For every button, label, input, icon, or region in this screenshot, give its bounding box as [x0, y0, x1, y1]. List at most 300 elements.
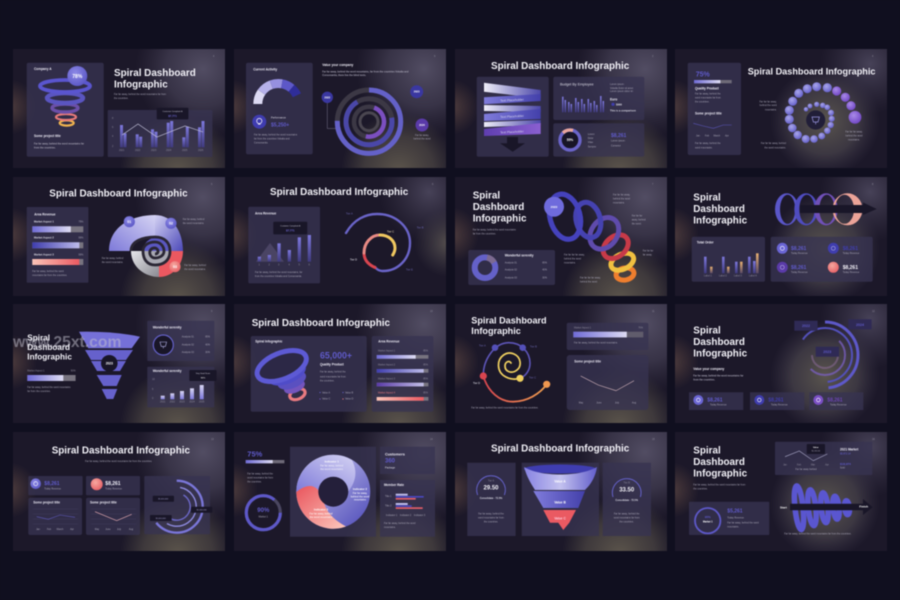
card: serenity ring: Analysis 01	[182, 336, 195, 339]
card: donut 55 percent: 55%	[567, 138, 573, 142]
text: label 01: the word mountains.	[102, 261, 124, 264]
card: area revenue chart: 4	[288, 264, 290, 267]
card: customers	[380, 447, 435, 474]
card: swirl donut: Far far away,	[353, 492, 368, 495]
card: member rate: Indicator 1	[386, 514, 398, 517]
text: project title: Some project title	[34, 134, 61, 138]
card: quality product: word mountains.	[695, 146, 713, 149]
panel: slide 7 ring chain: 7	[652, 183, 654, 186]
card: donut 55 percent: Vitae	[588, 141, 594, 144]
card: quality product: word mountains far from	[695, 96, 721, 99]
callout: tooltip: Very Good Score	[196, 372, 210, 375]
card: company A spiral	[27, 63, 104, 157]
badge: 2023: 2023	[106, 362, 113, 366]
panel: slide 9 funnel 2023: 9	[211, 310, 213, 313]
card: stacked funnel	[477, 77, 549, 157]
panel: slide 4 bead spiral: 4	[872, 55, 874, 58]
card: market 1: mountains.	[727, 526, 739, 529]
text: value your company: Far far away, behind the word mountains far	[693, 375, 743, 378]
card: revenue stats	[771, 237, 873, 282]
card: concentric arcs	[144, 476, 210, 534]
badge: 01	[124, 216, 135, 227]
badge: 03	[169, 261, 181, 272]
title: Spiral Dashboard	[114, 68, 196, 79]
diagram: funnel stack	[79, 332, 140, 399]
panel: slide 12 arcs and stats	[675, 304, 887, 423]
panel: slide 1 company A	[13, 49, 225, 168]
card: area revenue bars: 85%	[423, 391, 429, 394]
card: customers: 360	[385, 458, 396, 464]
text: ring label 2: Far far far	[632, 215, 642, 218]
stat card: revenue blue: $8,261	[44, 481, 60, 487]
progress bar: market aspect	[27, 370, 76, 381]
card: area revenue: Market Aspect 1	[34, 220, 54, 224]
card: area revenue chart: 5	[298, 264, 300, 267]
panel: slide 1 company A: 4	[213, 55, 215, 58]
bar chart: yearly values: 2023	[151, 149, 157, 152]
card: area revenue chart	[248, 207, 320, 283]
line chart: jan to apr: Apr	[70, 528, 74, 531]
card: area revenue: Market Aspect 2	[34, 236, 54, 240]
card: area revenue	[27, 207, 88, 283]
card: member rate	[380, 480, 435, 537]
card: donut 55 percent: Lorem ipsum	[611, 140, 625, 143]
diagram: twisted spiral on arrow	[790, 485, 873, 530]
title: Infographic	[693, 469, 748, 480]
card: wonderful serenity: 30%	[542, 276, 548, 279]
bar chart: yearly values: 8	[112, 117, 114, 120]
panel: slide 5 nautilus spiral	[13, 177, 225, 296]
card: area revenue: Far far away, behind the word	[32, 270, 64, 273]
donut: 90 percent: 90%	[257, 508, 270, 514]
card: market aspect: 76%	[638, 326, 644, 329]
card: spiral infographic: Spiral Infographic	[255, 340, 283, 344]
badge: 78 percent: 78%	[72, 74, 83, 80]
card: value funnel: Value B	[554, 500, 566, 504]
card: serenity bars	[147, 367, 214, 407]
card: gauge 33.50: the countries.	[620, 521, 634, 524]
text: description: Far far away, behind the word mountains	[27, 386, 70, 389]
card: revenue stats: Today Revenue	[791, 252, 808, 255]
diagram: nautilus spiral	[109, 215, 183, 277]
text: description: the countries.	[693, 488, 708, 491]
bar chart: yearly values: 2025	[182, 149, 188, 152]
panel: slide 2 value your company	[234, 49, 446, 168]
card: budget by employee: Vokalia Dolor sit amet	[610, 87, 633, 90]
card: quality product: Some project title	[695, 112, 722, 116]
stat card: revenue 2: $8,261	[768, 398, 784, 404]
text: ring label 1: mountains.	[613, 202, 625, 205]
card: revenue stats: Today Revenue	[791, 271, 808, 274]
text: tier labels: Tier A	[479, 344, 486, 348]
bar chart: yearly values: 2026	[198, 149, 204, 152]
panel: slide 16 spiral arrow	[675, 432, 887, 551]
chart: concentric arcs	[787, 317, 863, 393]
badge: 2023	[101, 355, 118, 372]
card: donut 55 percent: Dolor	[588, 137, 594, 140]
card: gauge 33.50: word mountains far from	[614, 516, 640, 519]
text: value your company: Value your company	[693, 367, 724, 371]
card: total order chart: Label 2	[719, 274, 728, 277]
card: total order chart: Total Order	[697, 240, 714, 244]
callout: tooltip	[273, 222, 307, 234]
card: swirl donut: Indicator 2	[353, 487, 367, 491]
card: budget by employee: Euro	[610, 98, 617, 102]
card: serenity bars: 10	[152, 378, 155, 381]
card: wonderful serenity: Analysis 02	[505, 269, 518, 272]
panel: slide 13 line charts	[13, 432, 225, 551]
text: tier labels: Tier B	[417, 225, 424, 229]
text: ring label 5: Far far far far away,	[580, 276, 601, 279]
panel: slide 3 funnel and budget	[455, 49, 667, 168]
card: market line chart: 2021 Market	[840, 448, 859, 452]
marker: 2023	[410, 85, 423, 98]
text: description: Far far away, behind the word mountains far from	[693, 483, 745, 486]
heading: value your company: Far far away, behind the word mountains, far from the countries Vokalia and	[322, 70, 409, 73]
panel: slide 6 area revenue spiral: 6	[432, 183, 434, 186]
progress bar: market aspect: 90%	[71, 370, 76, 373]
title: Dashboard	[27, 343, 70, 352]
card: swirl donut: Far far away, behind	[320, 464, 344, 468]
text: ring label 5: behind the word.	[580, 280, 598, 283]
card: donut 55 percent: Sempre	[588, 145, 597, 148]
card: serenity bars: 2025	[199, 401, 205, 404]
card: spiral infographic: word mountains far from	[320, 375, 346, 378]
bar chart: yearly values	[108, 110, 212, 157]
heading: value your company: Consonantia, there live the blind texts.	[322, 74, 366, 77]
card: swirl donut	[290, 447, 376, 537]
badge: 2023	[544, 197, 564, 217]
stat card: revenue 2	[750, 392, 804, 410]
card: serenity ring: Analysis 03	[182, 351, 195, 354]
text: tier labels: Tier E	[406, 267, 413, 271]
text: caption: Far far away, behind the word mountains far from the countries.	[471, 406, 539, 409]
text: bead label left: behind the word	[760, 104, 777, 107]
card: area revenue chart: 6	[308, 264, 310, 267]
card: gauge 29.50: Consolidate - 72.5%	[480, 497, 503, 500]
card: stacked funnel: Text Placeholder	[500, 129, 525, 135]
card: serenity bars: 5	[152, 388, 154, 391]
card: total order chart: Label 1	[704, 274, 713, 277]
card: quality product: Feb	[705, 135, 710, 138]
card: market line chart: Apr	[825, 464, 829, 467]
callout: tooltip: $1,200.00	[812, 450, 820, 452]
card: quality product: Jan	[696, 135, 701, 138]
panel: slide 4 bead spiral	[675, 49, 887, 168]
text: ring label 2: the word.	[632, 223, 642, 226]
text: description: the countries.	[247, 481, 262, 484]
stat card: revenue 1: Today Revenue	[710, 404, 727, 407]
panel: slide 2 value your company: 9	[434, 55, 436, 58]
panel: slide 16 spiral arrow: 16	[872, 438, 875, 441]
panel: slide 14 swirl donut: 14	[430, 438, 433, 441]
card: budget by employee: Budget By Employee	[560, 83, 594, 87]
label: 2022: 2022	[802, 324, 810, 328]
card: line chart: June	[596, 401, 602, 404]
panel: slide 12 arcs and stats: 12	[872, 310, 875, 313]
card: gauge 29.50: the countries.	[484, 521, 499, 524]
card: area revenue bars: Market Aspect 2	[378, 364, 396, 367]
donut: 90 percent: Market 1	[259, 515, 269, 518]
line chart: may to aug	[86, 498, 140, 535]
card: spiral infographic: Value C	[322, 398, 331, 401]
card: serenity ring: 40%	[205, 343, 211, 346]
card: member rate: Far far away, behind the word	[384, 522, 415, 525]
panel: slide 5 nautilus spiral: 5	[211, 183, 213, 186]
card: stacked funnel: Text Placeholder	[500, 98, 525, 103]
marker: 2024	[413, 118, 431, 141]
line chart: may to aug: Some project title	[90, 500, 117, 504]
card: market line chart: Sold	[840, 466, 845, 469]
card: gauge 29.50: word mountains far from	[478, 516, 504, 519]
card: revenue stats: $8,261	[791, 246, 807, 252]
card: serenity bars: 2021	[160, 401, 166, 404]
card: area revenue bars: 85%	[423, 364, 429, 367]
stat card: revenue 3: Today Revenue	[830, 404, 847, 407]
card: serenity bars: Wonderful serenity	[153, 369, 182, 373]
card: spiral infographic: 65,000+	[320, 350, 352, 360]
card: gauge 29.50: 29.50	[483, 486, 499, 492]
text: bead label left: mountains.	[765, 109, 777, 112]
title: Spiral Dashboard Infographic	[748, 66, 875, 76]
card: serenity ring	[147, 321, 214, 361]
callout: tooltip	[189, 370, 217, 381]
title: Dashboard	[473, 202, 524, 213]
title: Spiral	[693, 325, 721, 336]
card: gauge 33.50: 33.50	[619, 488, 635, 494]
text: ring label 3: far away.	[643, 254, 653, 257]
diagram: 3D cone spiral	[253, 344, 320, 410]
card: serenity bars: 2024	[189, 401, 195, 404]
card: total order chart: Label 3	[734, 274, 743, 277]
callout: tooltip	[157, 108, 188, 119]
panel: slide 7 ring chain	[455, 177, 667, 296]
text: description: word mountains far from	[247, 477, 273, 480]
card: wonderful serenity: Analysis 01	[505, 261, 518, 264]
badge: 01: 01	[127, 220, 131, 224]
card: spiral infographic: Quality Product	[320, 362, 345, 366]
label: finish: Finish	[859, 505, 868, 509]
title: Spiral	[27, 334, 50, 343]
card: area revenue chart: Far far away, behind the word mountains, far	[255, 271, 302, 274]
card: line chart: May	[579, 401, 584, 404]
card: member rate: Title 1	[385, 495, 392, 498]
card: quality product: the countries.	[695, 100, 710, 103]
text: intro: Far far away, behind the word mountains far from	[114, 93, 166, 96]
card: donut 55 percent: $8,261	[611, 133, 627, 139]
title: Infographic	[693, 349, 748, 360]
card: gauge 33.50	[603, 463, 651, 536]
text: ring label 2: away, behind	[632, 219, 646, 222]
progress bar: 75 percent	[246, 460, 284, 463]
card: spiral infographic: Value A	[322, 391, 330, 394]
card: area revenue: mountains far from the countries.	[32, 274, 68, 277]
card: budget by employee: $999	[616, 102, 622, 106]
title: Spiral	[693, 445, 721, 456]
progress bar: market aspect: Market Aspect 1	[27, 370, 45, 373]
card: wonderful serenity: 40%	[542, 269, 548, 272]
card: total order chart	[692, 237, 765, 282]
card: area revenue bars: Market Aspect 3	[378, 377, 396, 380]
bar chart: yearly values: 4	[112, 135, 114, 138]
line chart: may to aug: June	[105, 528, 111, 531]
title: Spiral Dashboard Infographic	[252, 318, 390, 329]
card: quality product: Apr	[725, 135, 729, 138]
card: swirl donut: Indicator 3	[314, 508, 328, 512]
card: area revenue chart: 3	[278, 264, 280, 267]
marker: 2024: Far far away,	[415, 134, 429, 137]
card: swirl donut: Indicator 1	[325, 460, 339, 464]
card: line chart: July	[615, 401, 620, 404]
card: swirl donut: the word mountains	[310, 516, 333, 519]
card: line chart	[567, 355, 648, 410]
marker: 2023: 2023	[414, 90, 420, 94]
label: start: Start	[780, 506, 787, 510]
title: Spiral Dashboard Infographic	[49, 189, 188, 200]
card: wonderful serenity: Analysis 03	[505, 276, 518, 279]
title: Spiral Dashboard	[471, 315, 547, 325]
card: serenity ring: 65%	[205, 336, 211, 339]
line chart: jan to apr: Some project title	[33, 500, 60, 504]
diagram: rings on arrow	[775, 193, 862, 225]
card: area revenue bars: Market Aspect 1	[378, 350, 396, 353]
callout: tooltip: Customer Complaint A	[280, 224, 301, 228]
card: company A spiral: Company A	[34, 67, 52, 71]
card: member rate: mountains.	[384, 526, 396, 529]
text: activity description: Far far away, behind the word mountains	[254, 134, 297, 137]
label: 2024: 2024	[856, 323, 864, 327]
label: value two	[191, 507, 212, 513]
stat card: revenue 3	[809, 392, 863, 410]
label: value three: $1,000,000	[156, 518, 167, 520]
label: 2024	[848, 319, 872, 329]
diagram: ring chain	[545, 191, 636, 281]
card: serenity ring: 30%	[205, 351, 211, 354]
panel: slide 10 spiral infographic: 10	[430, 310, 433, 313]
card: value funnel: Value A	[554, 479, 566, 483]
panel: slide 15 value funnel: 15	[652, 438, 655, 441]
card: market 1: Today Revenue	[727, 516, 745, 519]
label: 2022	[794, 321, 818, 331]
text: ring label 1: Far far far away,	[613, 194, 630, 197]
title: Spiral	[473, 191, 500, 202]
card: market 1: Far far away, behind the word	[727, 521, 759, 524]
stat card: revenue red	[86, 476, 140, 495]
text: bead label bottom: the word mountains.	[764, 146, 786, 149]
panel: slide 9 funnel 2023	[12, 304, 225, 423]
text: ring label 4: Far far far far away,	[564, 254, 585, 257]
text: project title: Far far away, behind the word mountains far	[34, 143, 84, 146]
bar chart: yearly values: 6	[112, 126, 114, 129]
arrow: start to finish	[790, 499, 873, 515]
text: intro: far from the countries.	[473, 232, 496, 235]
card: serenity ring: Analysis 02	[182, 343, 195, 346]
card: current activity	[246, 63, 313, 154]
title: Infographic	[27, 352, 72, 361]
card: current activity: Current Activity	[253, 68, 277, 72]
card: value funnel	[522, 463, 599, 536]
text: tier labels: Tier C	[529, 375, 536, 379]
card: spiral infographic: Far far away, behind the	[320, 371, 346, 374]
card: budget by employee: This is a comparison	[610, 108, 636, 112]
chart: concentric rings	[337, 90, 401, 153]
marker: 2024: 2024	[419, 123, 425, 127]
card: customers: Customers	[385, 452, 405, 456]
card: budget by employee	[553, 77, 644, 120]
text: caption: Far far away, behind the word mountains far from the countries.	[784, 533, 852, 536]
panel: slide 10 spiral infographic	[234, 304, 446, 423]
panel: slide 11 tier spiral: 11	[652, 310, 655, 313]
text: ring label 3: Far far far	[643, 250, 653, 253]
card: area revenue chart: 2	[268, 264, 270, 267]
marker: 2022: 2022	[324, 95, 331, 99]
panel: slide 3 funnel and budget: 3	[652, 55, 654, 58]
title: Dashboard	[693, 204, 745, 215]
label: value three	[150, 515, 172, 521]
card: total order chart: Label 4	[749, 274, 758, 277]
card: spiral infographic	[251, 336, 367, 412]
card: gauge 29.50	[467, 463, 516, 536]
card: area revenue bars: 85%	[423, 377, 429, 380]
text: bead label left: Far far far away,	[759, 100, 777, 103]
card: gauge 33.50: Consolidate - 72.5%	[615, 499, 639, 502]
stat card: revenue 1	[689, 392, 743, 410]
card: member rate: Member Rate	[384, 483, 404, 487]
text: ring label 1: behind the word	[613, 197, 631, 200]
card: value funnel: Value C	[554, 517, 566, 521]
title: Spiral Dashboard Infographic	[491, 61, 630, 72]
card: customers: Package	[385, 465, 396, 469]
callout: tooltip: 90%	[201, 378, 205, 380]
line chart: may to aug: July	[117, 528, 122, 531]
text: tier labels: Tier A	[346, 211, 353, 215]
line chart: jan to apr: March	[57, 528, 64, 531]
text: bead label right: Far far far away,	[845, 131, 863, 134]
card: market 1: 90%	[705, 515, 711, 519]
card: market 1: Market 1	[703, 520, 713, 524]
icon: trophy center	[806, 110, 825, 130]
badge: 2023: 2023	[551, 205, 558, 209]
callout: tooltip: Value	[813, 447, 819, 449]
card: revenue stats: $8,261	[843, 246, 858, 252]
bar chart: yearly values: 2022	[135, 149, 141, 152]
card: swirl donut: behind the word	[351, 495, 370, 498]
panel: slide 6 area revenue spiral	[234, 177, 446, 296]
card: market line chart: $5,872.14	[840, 452, 851, 455]
callout: tooltip	[807, 444, 825, 454]
text: project title: from the countries.	[34, 146, 56, 149]
card: line chart: Aug	[632, 401, 637, 404]
text: 75 percent: 75%	[247, 450, 263, 459]
panel: slide 8 ring arrow: 8	[872, 183, 874, 186]
card: member rate: Indicator 3	[414, 514, 426, 517]
line chart: may to aug: May	[95, 528, 100, 531]
card: budget by employee: Lorem ipsum	[610, 83, 624, 86]
card: gauge 33.50: Tier B	[624, 482, 630, 485]
label: 2023	[816, 347, 839, 357]
line chart: jan to apr	[28, 498, 82, 535]
card: quality product	[688, 63, 741, 155]
text: tier labels	[346, 211, 424, 271]
title: Spiral Dashboard Infographic	[52, 446, 190, 457]
card: spiral infographic: Value D	[345, 398, 354, 401]
card: donut 55 percent: Lorem	[588, 133, 594, 136]
text: bead label right: behind the word	[845, 135, 863, 138]
text: label 02: the word mountains.	[183, 222, 205, 225]
text: tier labels: Tier B	[530, 345, 537, 349]
badge: 02	[165, 218, 177, 229]
title: Spiral Dashboard Infographic	[270, 187, 409, 198]
